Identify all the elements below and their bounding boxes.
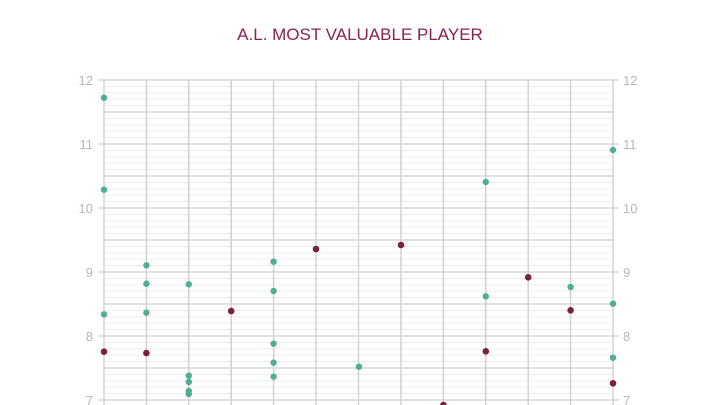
axis labels: right — [623, 73, 637, 405]
axis labels: left: 12 — [79, 73, 93, 88]
axis labels: right: 11 — [623, 137, 636, 152]
dots: teal series — [101, 94, 616, 397]
axis labels: left: 11 — [80, 137, 93, 152]
axis labels: left: 10 — [79, 201, 93, 216]
axis labels: right: 8 — [623, 329, 630, 344]
axis labels: left — [79, 73, 93, 405]
title: A.L. MOST VALUABLE PLAYER — [237, 25, 483, 44]
axis labels: left: 8 — [86, 329, 93, 344]
axis labels: right: 10 — [623, 201, 637, 216]
dots: maroon series — [101, 242, 616, 405]
axis labels: right: 12 — [623, 73, 637, 88]
gridlines — [98, 80, 619, 405]
axis labels: left: 9 — [86, 265, 93, 280]
axis labels: right: 9 — [623, 265, 630, 280]
